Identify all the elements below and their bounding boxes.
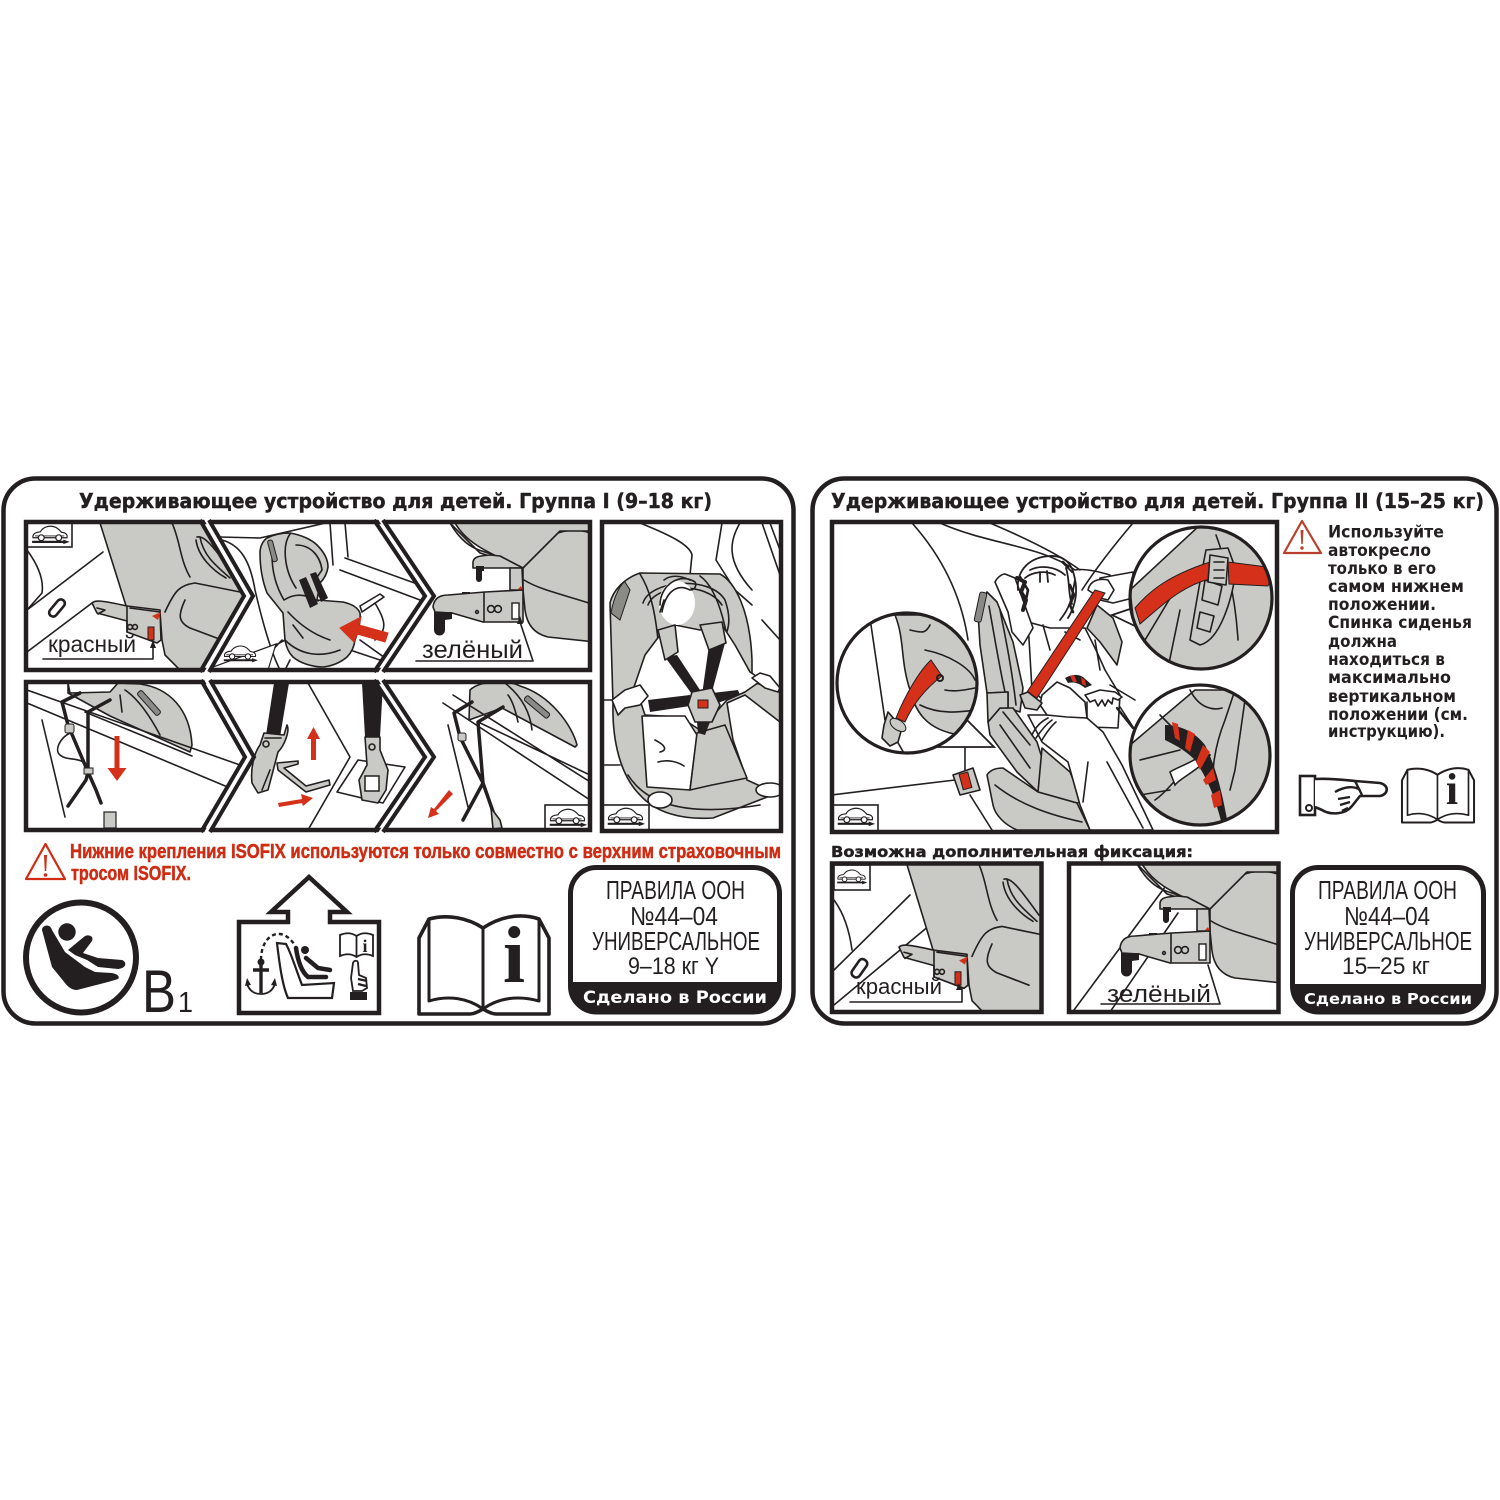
icon: ISOFIX class circle B1: 1 bbox=[178, 987, 193, 1019]
step 6: tighten straps bbox=[428, 682, 595, 832]
warning: seat position instructions: автокресло bbox=[1328, 541, 1431, 560]
warning: seat position instructions: вертикальном bbox=[1328, 687, 1456, 706]
lap leg bbox=[1028, 715, 1153, 830]
chevron frames: row 2 bbox=[26, 676, 590, 836]
approval label: group II bbox=[1292, 868, 1484, 1012]
detail circle: upper belt guide bbox=[1128, 525, 1274, 671]
warning: seat position instructions: Используйте bbox=[1328, 522, 1444, 542]
icon: small book: i bbox=[362, 936, 368, 956]
step 5: attach anchor hook bbox=[252, 683, 405, 830]
warning: seat position instructions: только в его bbox=[1328, 559, 1436, 578]
top hand and sleeve bbox=[1100, 572, 1133, 603]
seat side band bbox=[988, 708, 1042, 792]
approval label: group I: УНИВЕРСАЛЬНОЕ bbox=[592, 926, 760, 956]
step 2: push seat onto connectors bbox=[205, 522, 420, 670]
approval label: group I: ПРАВИЛА ООН bbox=[606, 875, 745, 905]
step 1: locate red indicator on ISOFIX connector bbox=[26, 522, 250, 672]
warning: seat position instructions: максимально bbox=[1328, 668, 1451, 687]
heading: additional fixation: Возможна дополнительная фиксация: bbox=[831, 843, 1193, 861]
hair bbox=[1018, 556, 1076, 620]
icon: finger bbox=[350, 961, 367, 1000]
icon: anchor bbox=[245, 958, 277, 994]
detail circle: striped belt under arm bbox=[1130, 685, 1280, 830]
approval label: group I: Сделано в России bbox=[583, 988, 767, 1007]
icon: big instruction book bbox=[419, 912, 549, 1014]
icon: small instruction book bbox=[1402, 765, 1474, 822]
frame: additional fixation, green indicator bbox=[1069, 864, 1282, 1012]
warning: seat position instructions bbox=[1284, 521, 1472, 741]
heading: group II: Удерживающее устройство для детей. Группа II (15–25 кг) bbox=[831, 489, 1484, 513]
icon: small instruction book: i bbox=[1446, 765, 1458, 814]
seat rear bbox=[1038, 748, 1082, 803]
frame: additional fixation, red indicator bbox=[832, 864, 1057, 1018]
warning: seat position instructions: должна bbox=[1328, 632, 1397, 651]
shoulder gray bbox=[1087, 605, 1122, 665]
illustration: belt routing with detail circles bbox=[831, 522, 1290, 832]
warning: seat position instructions: Спинка сиденья bbox=[1328, 613, 1472, 632]
warning: seat position instructions: находиться в bbox=[1328, 650, 1445, 669]
jacket bbox=[633, 625, 762, 730]
approval label: group I bbox=[570, 868, 780, 1012]
face bbox=[1028, 577, 1062, 619]
car icon bbox=[833, 805, 878, 831]
chevron frames: row 1 bbox=[26, 516, 590, 676]
seat cushion bbox=[987, 768, 1090, 830]
detail pointers bbox=[937, 720, 994, 747]
step 3: green indicator on ISOFIX connector: зелёный bbox=[422, 636, 523, 664]
warning: seat position instructions: положении. bbox=[1328, 595, 1436, 614]
small hand bbox=[1085, 690, 1122, 706]
icon: ISOFIX class circle B1: B bbox=[142, 958, 176, 1025]
step 1: locate red indicator on ISOFIX connector: красный bbox=[48, 631, 136, 657]
frame: additional fixation, red indicator: красный bbox=[856, 974, 942, 999]
icon: up-arrow house with seat, anchor and book bbox=[239, 877, 379, 1013]
icon: big instruction book: i bbox=[503, 912, 525, 1000]
step 3: green indicator on ISOFIX connector bbox=[416, 523, 595, 664]
icon: warning triangle bbox=[1284, 521, 1321, 553]
frame: additional fixation, green indicator: зелёный bbox=[1107, 981, 1211, 1008]
right leg bbox=[727, 695, 780, 795]
warning: ISOFIX red notice: тросом ISOFIX. bbox=[71, 863, 191, 885]
icon: pointing hand bbox=[1300, 776, 1387, 815]
icon: seat with child bbox=[277, 943, 334, 998]
warning: seat position instructions: самом нижнем bbox=[1328, 577, 1464, 596]
anchor path bbox=[261, 934, 295, 960]
panel: child buckled in the seat bbox=[603, 523, 784, 831]
buckle bbox=[953, 768, 980, 795]
approval label: group II: Сделано в России bbox=[1304, 990, 1472, 1008]
approval label: group I: 9–18 кг Y bbox=[628, 953, 719, 980]
approval label: group II: №44–04 bbox=[1344, 901, 1430, 931]
approval label: group II: 15–25 кг bbox=[1342, 953, 1430, 980]
approval label: group I: №44–04 bbox=[630, 901, 718, 931]
stray line of the frame crossing the heading bbox=[1101, 845, 1103, 865]
left leg bbox=[642, 716, 697, 790]
icon: ISOFIX class circle B1 bbox=[26, 902, 193, 1025]
arm bbox=[995, 574, 1033, 645]
shoulder belt bbox=[1027, 590, 1105, 698]
woman torso bbox=[1028, 622, 1120, 728]
panel: group II (15-25 kg) bbox=[812, 478, 1496, 1024]
lap hand bbox=[1040, 682, 1087, 718]
step 4: pull tether straps downward bbox=[27, 683, 240, 828]
heading: group I: Удерживающее устройство для детей. Группа I (9–18 кг) bbox=[79, 489, 712, 513]
seat backrest bbox=[978, 592, 1023, 712]
frame: child buckled in the seat bbox=[602, 522, 781, 831]
warning: seat position instructions: положении (см. bbox=[1328, 705, 1468, 724]
panel: group I (9-18 kg) bbox=[4, 478, 794, 1025]
striped lap belt bbox=[1065, 675, 1092, 688]
warning: ISOFIX red notice: Нижние крепления ISOFIX используются только совместно с верхним страховочным bbox=[70, 841, 781, 863]
warning: seat position instructions: инструкцию). bbox=[1328, 722, 1445, 741]
icon: warning triangle bbox=[26, 844, 65, 879]
warning: ISOFIX red notice bbox=[26, 841, 781, 885]
detail circle: lower belt anchor bbox=[837, 613, 985, 755]
